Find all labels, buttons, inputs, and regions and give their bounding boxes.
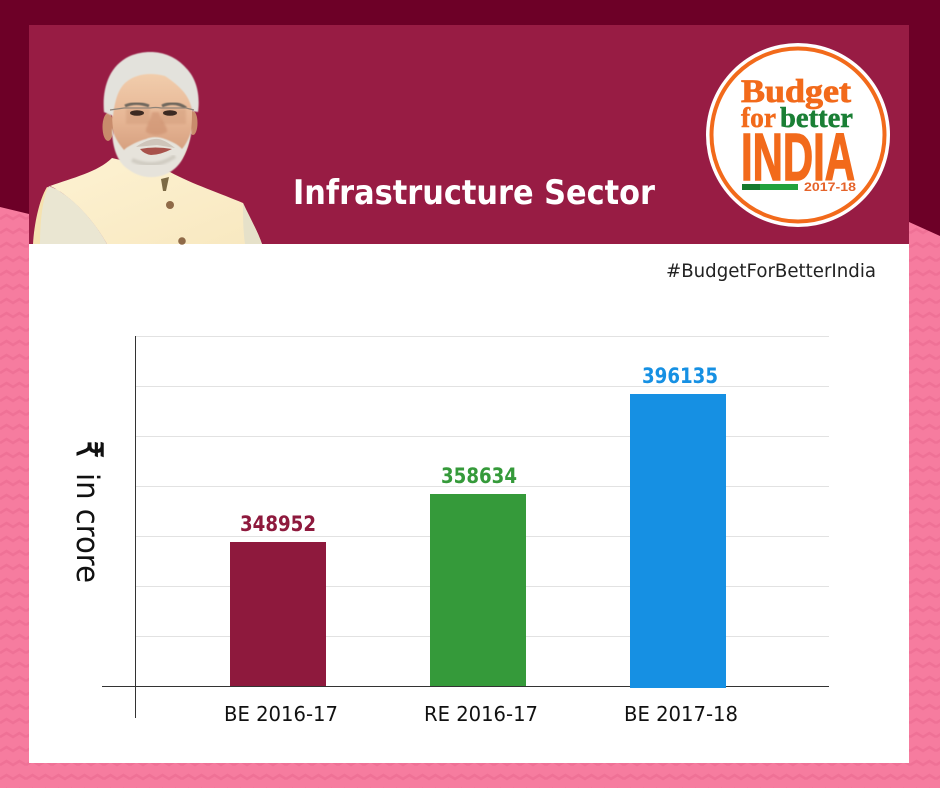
badge word: INDIA: INDIA <box>741 120 855 195</box>
background: dark maroon band <box>0 0 940 236</box>
y axis title: in crore <box>69 473 105 583</box>
badge word: Budget: Budget <box>741 74 851 110</box>
badge word: better: better <box>780 103 853 134</box>
value: 358634: 358634 <box>441 464 517 488</box>
hashtag: #BudgetForBetterIndia <box>666 260 876 282</box>
glasses <box>110 108 194 110</box>
bar: BE 2017-18 <box>630 394 726 688</box>
logo badge <box>706 43 890 227</box>
label: RE 2016-17: RE 2016-17 <box>424 702 538 726</box>
bar: RE 2016-17 <box>430 494 526 686</box>
beard shading <box>132 156 175 164</box>
mouth <box>140 148 172 155</box>
value: 396135: 396135 <box>642 364 718 388</box>
header panel <box>29 25 909 244</box>
nose <box>146 112 167 135</box>
eye shadows <box>126 109 186 124</box>
moustache <box>136 139 175 148</box>
eyes <box>130 110 144 116</box>
badge circle <box>706 43 890 227</box>
badge bar <box>742 184 798 190</box>
button one <box>166 201 174 209</box>
left sleeve <box>40 186 107 244</box>
axes <box>102 336 829 718</box>
badge year: 2017-18 <box>804 182 857 194</box>
ear right <box>188 111 198 135</box>
title: Infrastructure Sector <box>293 173 655 213</box>
bar: BE 2016-17 <box>230 542 326 686</box>
face <box>112 70 192 162</box>
badge word: for: for <box>741 103 776 134</box>
left vest edge <box>33 187 60 244</box>
portrait <box>33 52 262 245</box>
value: 348952: 348952 <box>240 512 316 536</box>
brows <box>125 103 186 108</box>
label: BE 2016-17: BE 2016-17 <box>224 702 338 726</box>
right sleeve <box>243 203 262 244</box>
badge ring <box>712 48 884 222</box>
torso <box>50 158 262 244</box>
badge bar dark end <box>742 184 760 190</box>
bar chart <box>68 336 829 726</box>
label: BE 2017-18: BE 2017-18 <box>624 702 738 726</box>
y axis rupee symbol: ₹ <box>68 441 109 458</box>
hair <box>104 52 199 116</box>
beard <box>112 128 192 177</box>
button two <box>178 237 186 245</box>
ear left <box>102 113 114 141</box>
content panel <box>29 244 909 763</box>
neck opening <box>161 177 169 191</box>
